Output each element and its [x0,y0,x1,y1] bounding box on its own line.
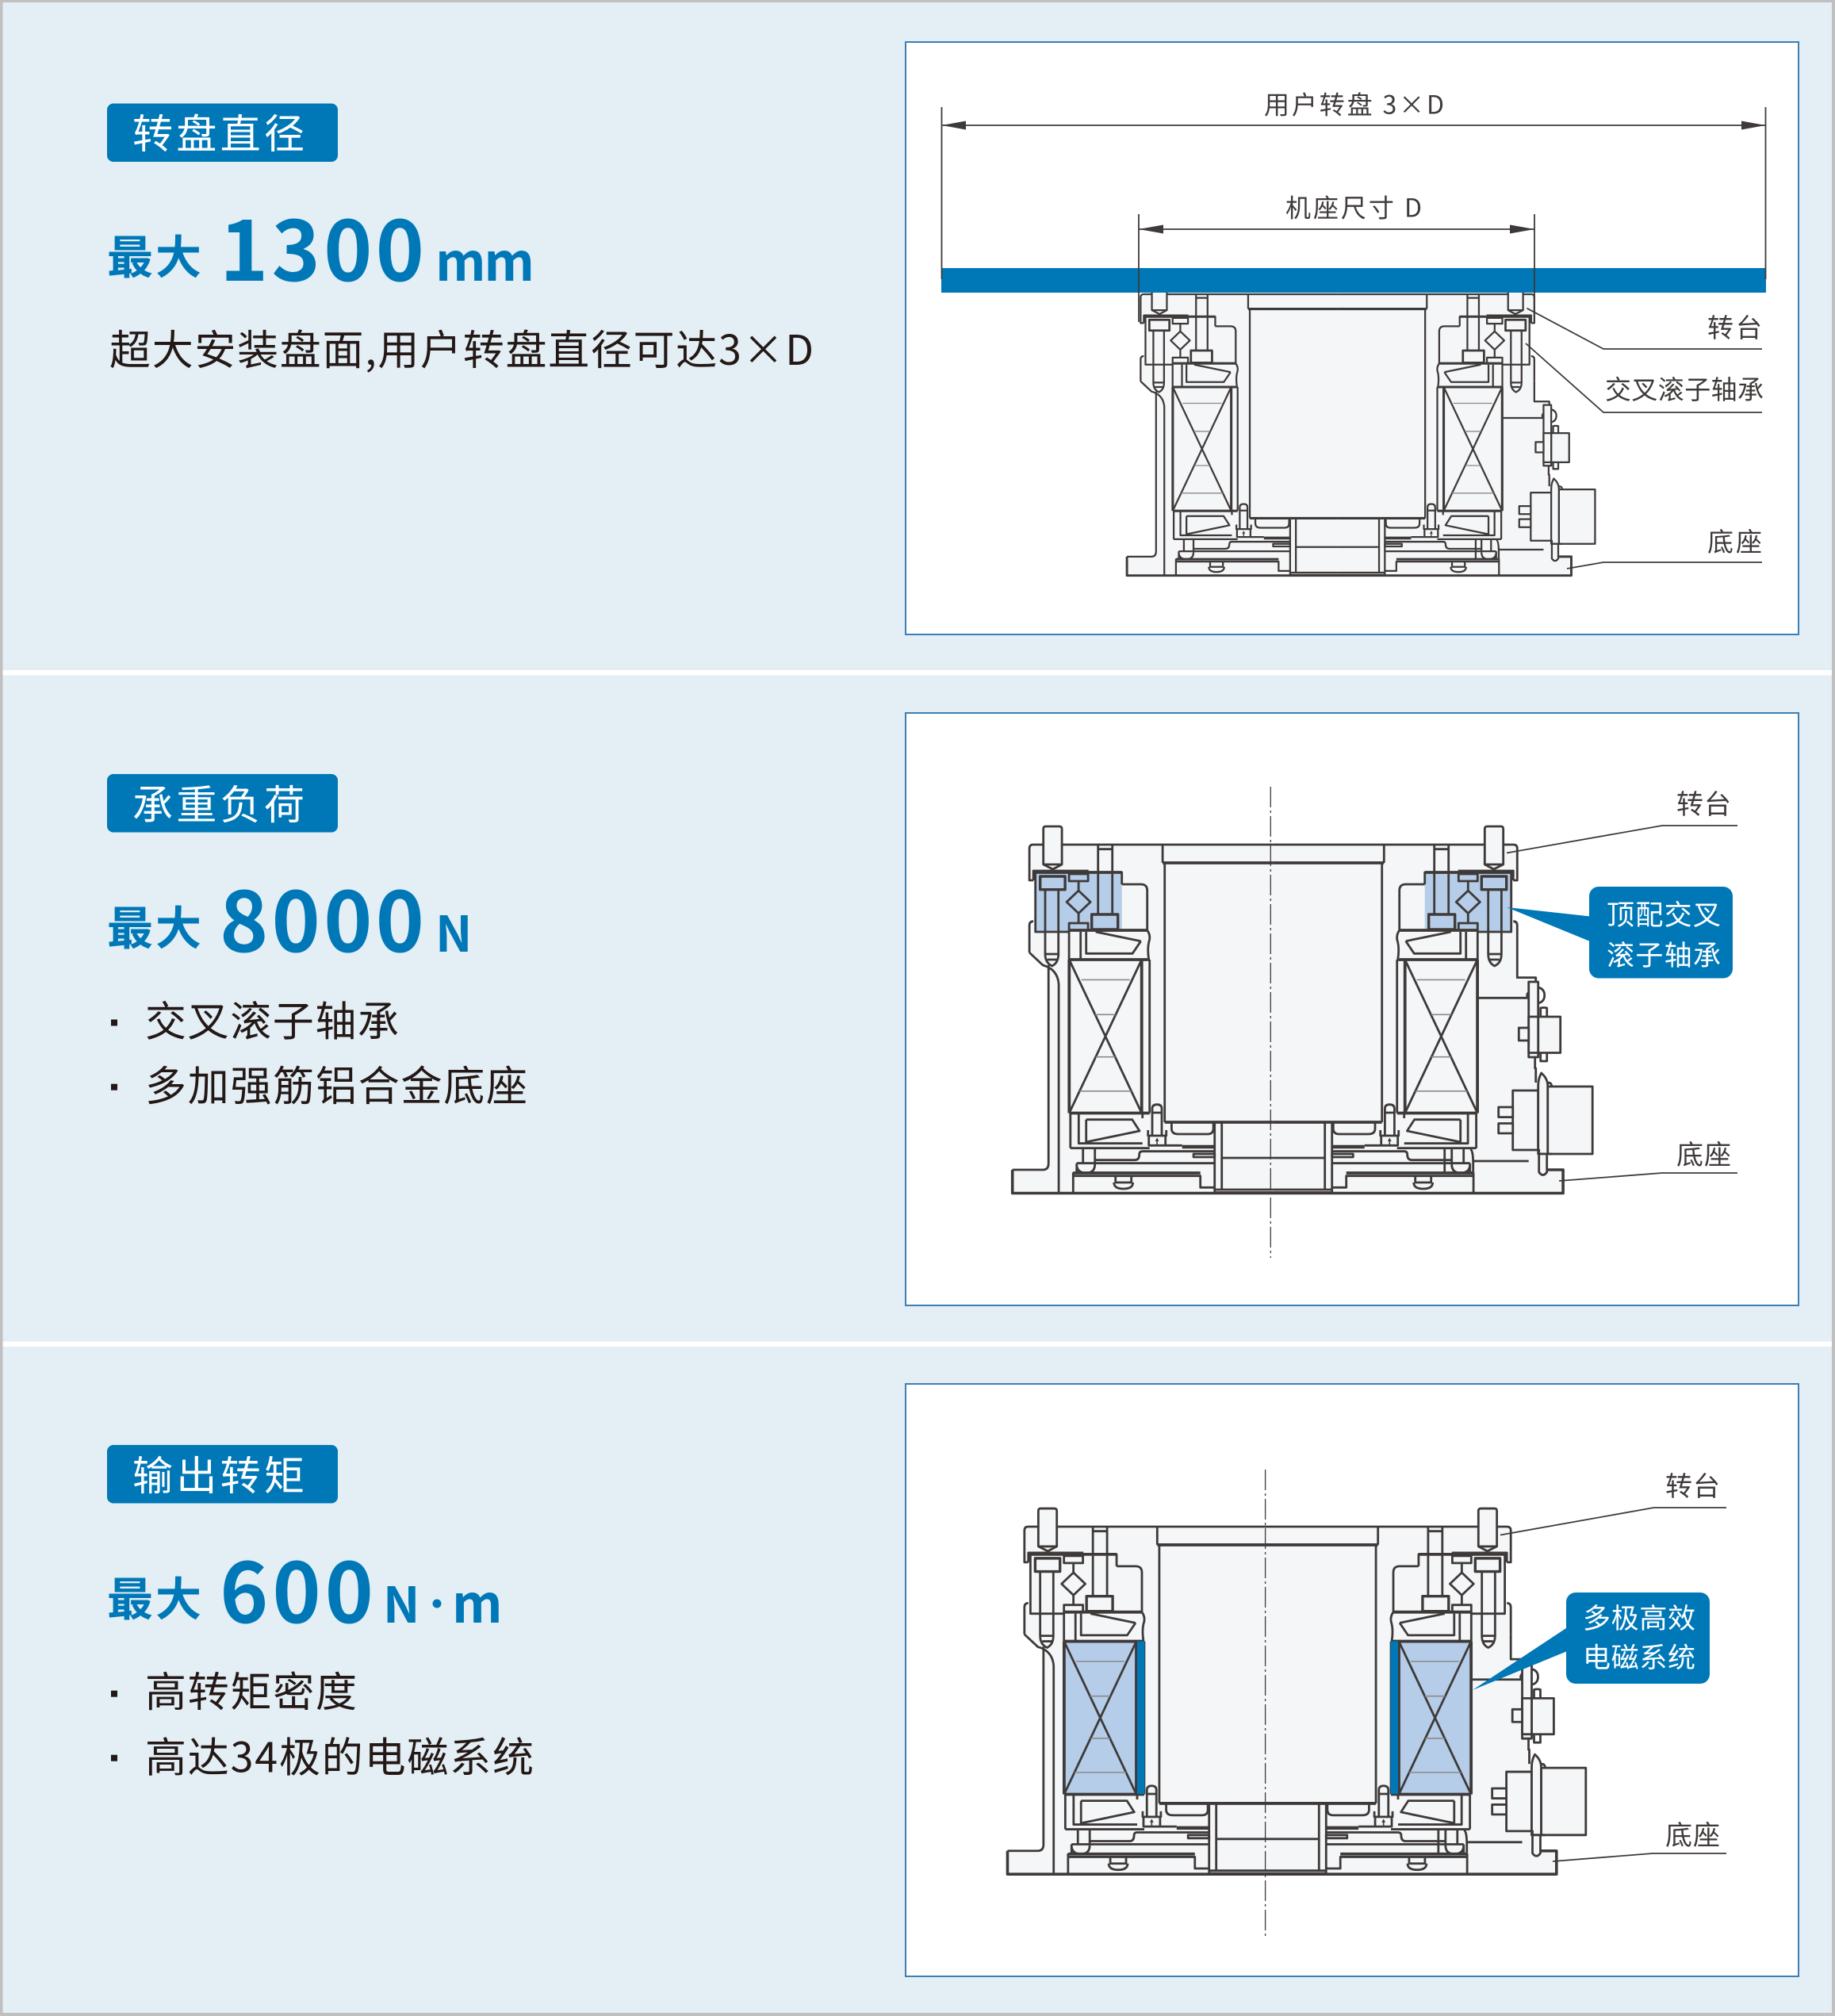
label: turntable: 转台 [1676,783,1731,822]
callout: multi-pole electromagnetic system: 电磁系统 [1583,1635,1695,1677]
callout: cross roller bearing [1507,887,1733,979]
label: base: 底座 [1665,1814,1720,1853]
callout: multi-pole electromagnetic system: 多极高效 [1583,1596,1695,1637]
bullet list: 交叉滚子轴承 [145,988,399,1048]
stat: max 600 N·m: 600 [220,1527,374,1646]
bullet list: 高转矩密度 [145,1659,357,1719]
callout: cross roller bearing: 顶配交叉 [1607,893,1721,933]
tag: output torque: 输出转矩 [132,1443,305,1502]
dimension: user turntable 3xD [942,86,1765,279]
label: base [1559,1133,1737,1181]
dimension: base size D [1139,189,1534,322]
bullet list: 多加强筋铝合金底座 [145,1053,527,1113]
motor cross-section with bearing highlight [1013,826,1592,1193]
stat: max 8000 N: 最大 [107,891,201,958]
panel: torque text [107,1443,534,1784]
center line [1265,1470,1266,1939]
label: turntable [1527,307,1762,349]
motor cross-section with coil highlight [1007,1508,1586,1874]
label: cross roller bearing [1526,343,1764,412]
description: 超大安装盘面,用户转盘直径可达3×D [109,317,814,377]
label: turntable [1507,783,1737,853]
label: turntable [1500,1465,1726,1535]
stat: max 600 N·m: N [383,1566,419,1637]
stat: max 1300 mm: 最大 [107,220,201,287]
stat: max 8000 N [107,856,472,975]
motor cross-section [1127,279,1595,576]
panel: turntable diameter diagram [906,42,1799,634]
tag: bearing load: 承重负荷 [132,772,305,831]
bullet list [111,988,527,1113]
bullet list [111,1659,534,1784]
stat: max 600 N·m [107,1527,503,1646]
callout: cross roller bearing: 滚子轴承 [1607,933,1721,974]
panel: load diagram [906,713,1799,1305]
blue turntable bar [941,268,1766,293]
label: base: 底座 [1707,521,1762,559]
stat: max 600 N·m: m [452,1562,503,1638]
panel: turntable diameter text [107,102,814,377]
label: turntable: 转台 [1665,1465,1720,1504]
label: base: 底座 [1676,1133,1731,1172]
stat: max 1300 mm [107,185,534,305]
bullet list: 高达34极的电磁系统 [145,1724,534,1784]
panel: torque diagram [906,1384,1799,1976]
stat: max 8000 N: N [435,895,472,966]
dimension: base size D: 机座尺寸 D [1285,189,1422,225]
callout: multi-pole electromagnetic system [1473,1592,1710,1690]
label: turntable: 转台 [1707,307,1762,345]
stat: max 1300 mm: 1300 [220,185,424,305]
stat: max 1300 mm: mm [435,220,534,297]
dimension: user turntable 3xD: 用户转盘 3×D [1264,86,1444,122]
label: base [1553,1814,1726,1861]
label: base [1567,521,1762,569]
center line [1270,787,1271,1258]
stat: max 8000 N: 8000 [220,856,424,975]
panel: load text [107,772,527,1113]
label: cross roller bearing: 交叉滚子轴承 [1605,369,1764,407]
stat: max 600 N·m: 最大 [107,1562,201,1629]
tag: turntable diameter: 转盘直径 [132,102,305,160]
